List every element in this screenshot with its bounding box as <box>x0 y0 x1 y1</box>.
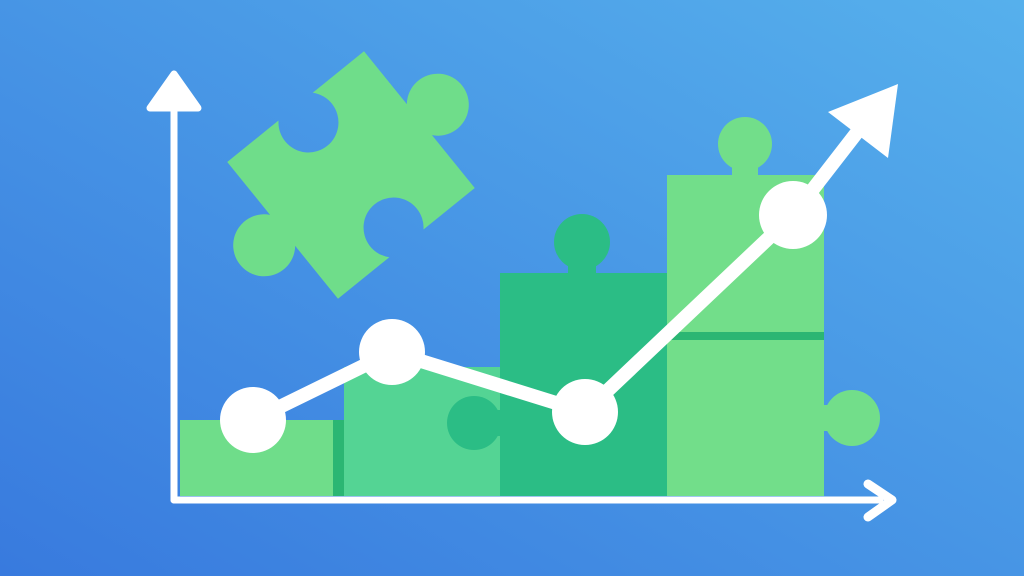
bar 2 <box>344 367 501 496</box>
bar chart: puzzle bars <box>180 117 880 496</box>
line chart with markers <box>220 84 898 453</box>
bar 4 <box>667 117 880 496</box>
icon: floating puzzle piece <box>185 17 517 333</box>
bar 3 <box>447 214 667 496</box>
axes <box>150 74 892 517</box>
arrowhead <box>828 84 898 158</box>
bar 1 <box>180 420 333 496</box>
